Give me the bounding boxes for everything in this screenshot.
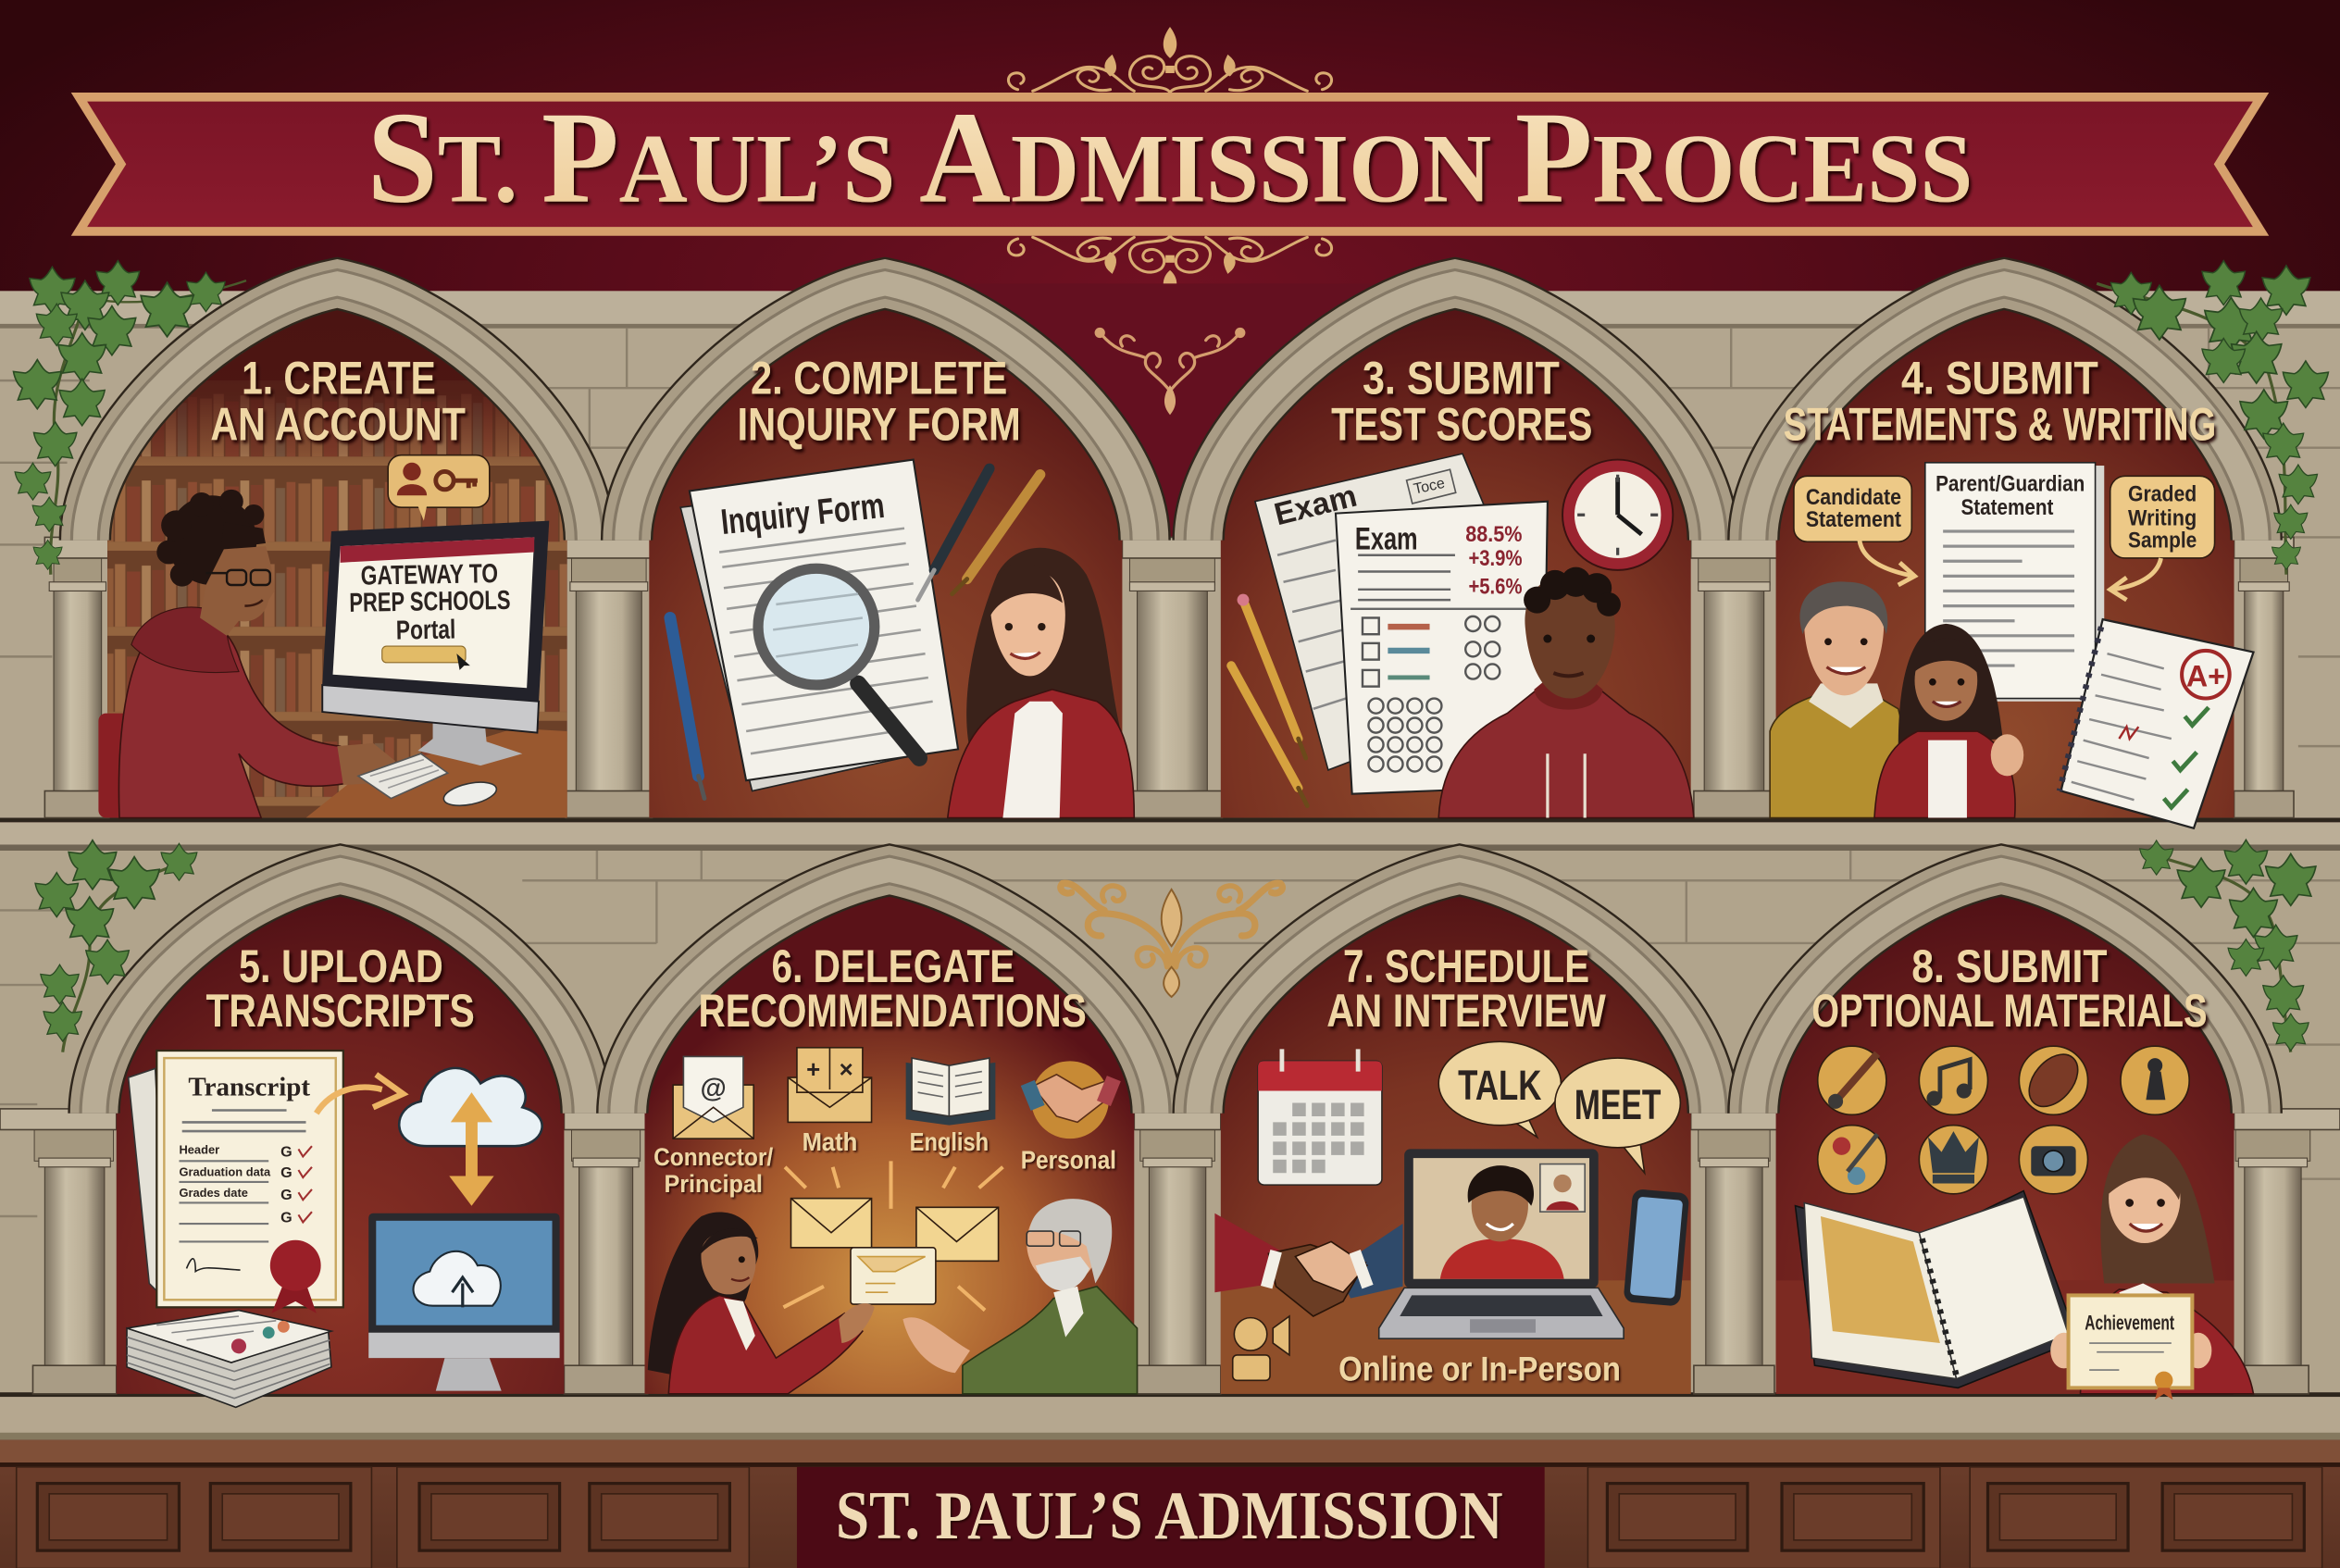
heading: TEST SCORES: [1331, 399, 1592, 451]
arrow: to cloud: [317, 1075, 403, 1114]
heading: OPTIONAL MATERIALS: [1811, 985, 2208, 1037]
pillars row 1: [44, 537, 2294, 818]
heading: 3. SUBMIT: [1363, 353, 1560, 404]
stone wall row 2: [0, 851, 2340, 1395]
top ornament: [1008, 27, 1332, 93]
paper stack: [127, 1311, 331, 1407]
callout: candidate statement: Candidate: [1806, 485, 1901, 510]
heading: INQUIRY FORM: [737, 399, 1021, 451]
transcript document: Grades date: [179, 1186, 248, 1200]
callout: graded writing sample: Writing: [2128, 506, 2197, 531]
laptop with video call: [1379, 1149, 1624, 1338]
icon: optional activity medallions: [1818, 1045, 2189, 1194]
exam front sheet: Exam: [1355, 521, 1418, 556]
stone ledge below row 2: [0, 1392, 2340, 1440]
ornament between arches 2 and 3: [1096, 330, 1244, 415]
title banner: [79, 85, 2261, 231]
heading: [737, 353, 1021, 451]
man: [1770, 581, 1925, 818]
heading: TRANSCRIPTS: [205, 985, 475, 1037]
label: english: English: [910, 1127, 989, 1156]
screen text: PREP SCHOOLS: [349, 586, 511, 618]
callout: candidate statement: [1794, 476, 1915, 585]
statement paper: Parent/Guardian: [1935, 471, 2085, 496]
heading: 5. UPLOAD: [239, 940, 443, 992]
portfolio book: [1796, 1191, 2077, 1388]
ivy: lower right: [2140, 840, 2316, 1052]
callout: talk: [1438, 1041, 1561, 1138]
boy: [1438, 567, 1694, 818]
callout: graded writing sample: Graded: [2128, 482, 2197, 507]
transcript document: Transcript: [188, 1072, 310, 1101]
transcript document: Header: [179, 1142, 219, 1156]
heading: STATEMENTS & WRITING: [1784, 399, 2216, 451]
exam front sheet: [1336, 502, 1548, 794]
heading: [205, 940, 475, 1037]
stone wall row 1: [0, 283, 2340, 821]
callout: graded writing sample: [2110, 476, 2215, 600]
callout: talk: TALK: [1458, 1062, 1542, 1109]
handshake: [1214, 1213, 1403, 1316]
transcript document: G: [280, 1187, 292, 1203]
callout: meet: [1555, 1058, 1680, 1173]
icon: math envelope: [788, 1048, 872, 1122]
exam back sheet: Exam: [1271, 479, 1361, 532]
student: [118, 490, 395, 818]
label: connector: Connector/: [653, 1143, 774, 1171]
stone ledge between rows: [0, 818, 2340, 851]
panel: step 2 complete inquiry form: [627, 283, 1145, 818]
icon: cloud with arrow: [399, 1068, 542, 1206]
transcript document: G: [280, 1164, 292, 1181]
exam front sheet: +3.9%: [1468, 546, 1522, 571]
heading: [1326, 940, 1606, 1037]
ivy: lower left: [35, 840, 197, 1052]
exam back sheet: [1255, 454, 1507, 770]
envelopes: [790, 1199, 999, 1304]
heading: 2. COMPLETE: [751, 353, 1007, 404]
older man: [902, 1199, 1138, 1394]
ivy: upper left: [14, 261, 246, 575]
screen text: GATEWAY TO: [360, 559, 498, 591]
background: maroon wall: [0, 0, 2340, 448]
icon: handshake: [1021, 1061, 1121, 1139]
screen text: Portal: [396, 616, 456, 646]
woman: [648, 1213, 875, 1394]
heading: AN ACCOUNT: [210, 399, 466, 451]
exam back sheet: Toce: [1412, 475, 1447, 498]
computer monitor: [368, 1213, 560, 1391]
panel: step 6 delegate recommendations: [622, 870, 1156, 1394]
panel: step 7 schedule an interview: [1199, 870, 1713, 1394]
icon: math envelope: +: [806, 1057, 820, 1083]
notebook: A+: [2186, 660, 2225, 693]
transcript document: Graduation data: [179, 1164, 271, 1178]
heading: RECOMMENDATIONS: [699, 985, 1087, 1037]
callout: graded writing sample: Sample: [2128, 529, 2197, 554]
footer sign: [797, 1467, 1545, 1568]
transcript document: [129, 1051, 343, 1313]
title: ST. PAUL’S ADMISSION PROCESS: [367, 85, 1973, 230]
chair: [98, 714, 146, 818]
icon: math envelope: ×: [840, 1057, 853, 1083]
icon: phone: [1624, 1188, 1689, 1307]
ornament: gold fleur on row 2 wall: [1061, 883, 1282, 997]
notebook: [2060, 619, 2253, 828]
icon: wax seal: [270, 1240, 321, 1313]
heading: 6. DELEGATE: [772, 940, 1014, 992]
heading: AN INTERVIEW: [1326, 985, 1606, 1037]
certificate: [2069, 1295, 2192, 1400]
icon: calendar: [1258, 1049, 1382, 1185]
heading: [1784, 353, 2216, 451]
heading: [699, 940, 1087, 1037]
transcript document: G: [280, 1209, 292, 1226]
exam front sheet: +5.6%: [1468, 575, 1522, 600]
panel: step 3 submit test scores: [1199, 283, 1713, 818]
screen text: [349, 559, 511, 647]
desk: [306, 728, 567, 818]
label: connector: Principal: [664, 1170, 763, 1198]
bottom ornament: [1008, 236, 1332, 302]
label: online or in-person: Online or In-Person: [1338, 1349, 1621, 1388]
heading: 8. SUBMIT: [1911, 940, 2107, 992]
exam front sheet: 88.5%: [1465, 522, 1522, 547]
heading: 4. SUBMIT: [1901, 353, 2098, 404]
heading: 7. SCHEDULE: [1343, 940, 1589, 992]
pillars row 2: [0, 1109, 2340, 1394]
label: personal: Personal: [1021, 1145, 1116, 1174]
panel: step 4 submit statements and writing: [1753, 283, 2257, 828]
icon: person video: [1233, 1316, 1289, 1380]
icon: connector envelope: [673, 1056, 753, 1139]
heading: [1331, 353, 1592, 451]
statement paper: Statement: [1960, 495, 2053, 520]
heading: [1811, 940, 2208, 1037]
icon: pens: [670, 468, 1040, 799]
icon: pencils: [1231, 594, 1307, 806]
label: math: Math: [803, 1127, 857, 1156]
callout: meet: MEET: [1575, 1081, 1662, 1128]
label: connector: [653, 1143, 774, 1198]
arrows: to envelopes: [783, 1161, 1002, 1311]
form paper: [680, 460, 958, 790]
girl: [948, 548, 1134, 818]
panel: step 1 create an account: [85, 283, 590, 821]
transcript document: G: [280, 1143, 292, 1160]
callout: candidate statement: Statement: [1806, 507, 1901, 532]
heading: 1. CREATE: [242, 353, 436, 404]
monitor: [322, 521, 549, 765]
heading: [210, 353, 466, 451]
icon: account bubble: [388, 455, 490, 521]
wood wainscot: [0, 1440, 2340, 1568]
footer text: ST. PAUL’S ADMISSION: [836, 1478, 1503, 1554]
certificate: Achievement: [2085, 1312, 2174, 1335]
girl in blazer: [1874, 624, 2023, 818]
student with certificate: [2050, 1134, 2253, 1400]
panel: step 5 upload transcripts: [94, 870, 587, 1407]
icon: open book: [906, 1058, 995, 1126]
panel: step 8 submit optional materials: [1753, 870, 2257, 1400]
keyboard and mouse: [358, 753, 499, 810]
form title: Inquiry Form: [719, 486, 887, 542]
ivy: upper right: [2097, 261, 2328, 575]
icon: wall clock: [1562, 460, 1673, 570]
icon: connector envelope: @: [701, 1074, 727, 1103]
magnifier: [758, 568, 919, 758]
statement paper: [1925, 463, 2104, 702]
